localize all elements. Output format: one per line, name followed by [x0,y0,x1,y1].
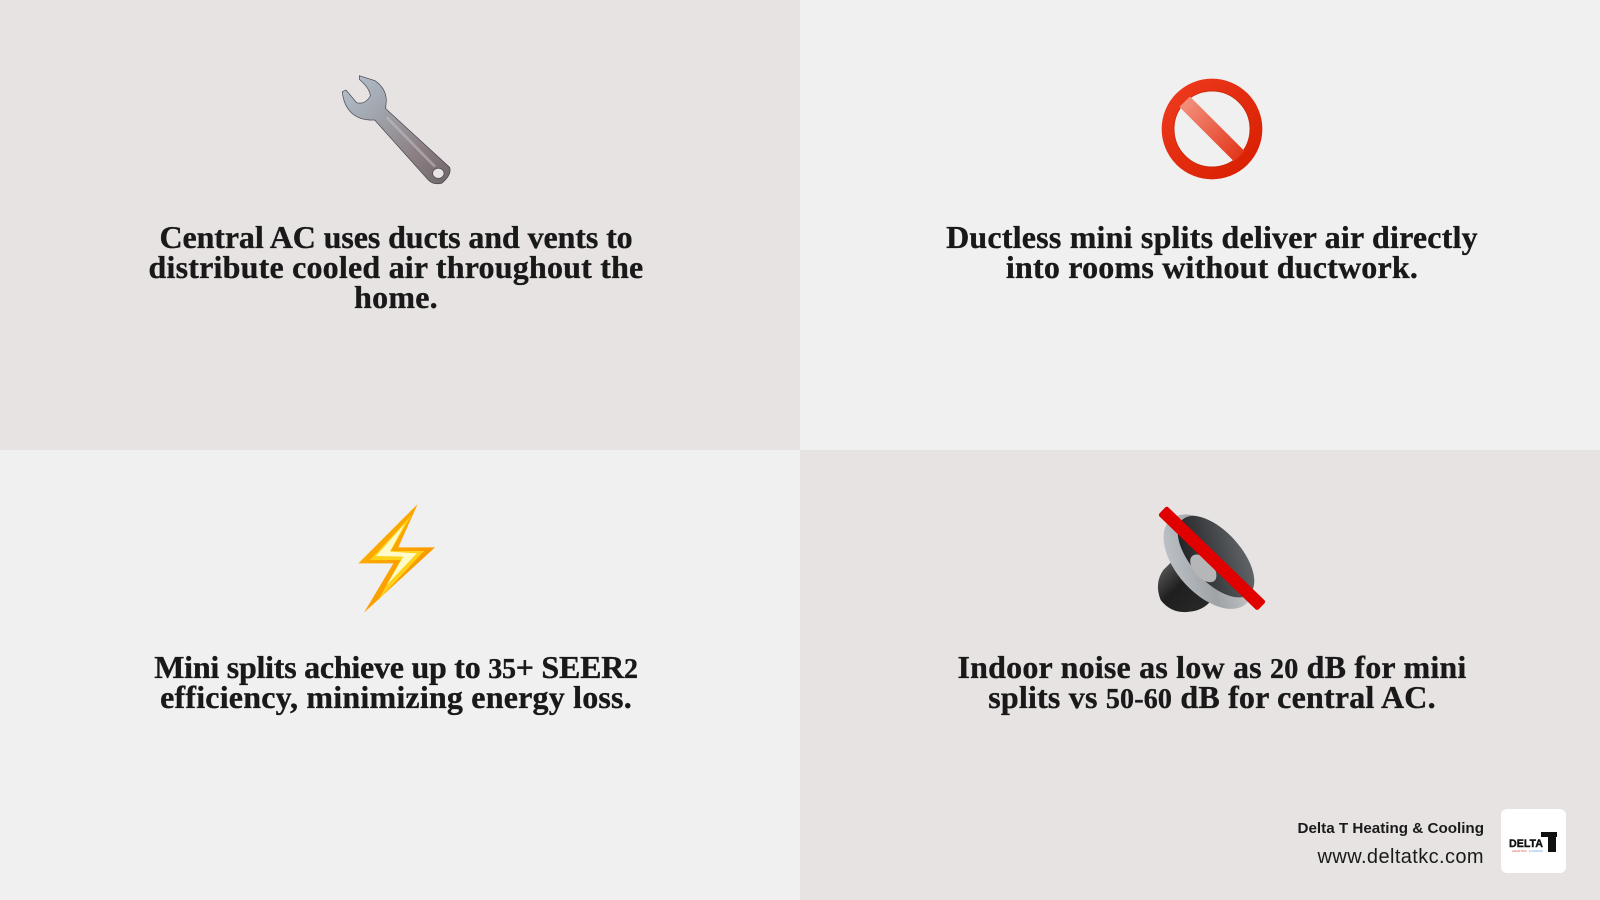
logo: Delta T [1501,809,1566,873]
panel: central AC [0,0,800,450]
text: efficiency [154,649,638,716]
text: central AC: home. [354,279,438,315]
company name: Delta T Heating & Cooling [1298,820,1484,837]
text: noise: Indoor noise as low as 20 dB for mini [958,649,1466,685]
website: www.deltatkc.com [1318,846,1484,868]
icon: muted speaker [1158,506,1266,612]
text: central AC [149,219,643,315]
text: central AC: distribute cooled air throughout the [149,249,643,285]
text: noise: splits vs 50-60 dB for central AC. [988,679,1436,715]
text: noise [958,649,1466,716]
text: ductless mini splits: Ductless mini splits deliver air directly [946,219,1478,255]
text: efficiency: efficiency, minimizing energy loss. [160,679,632,715]
text: central AC: Central AC uses ducts and vents to [159,219,633,255]
logo: Delta T: & COOLING [1529,849,1544,853]
panel: ductless mini splits [800,0,1600,450]
icon: prohibited sign [1162,78,1262,180]
logo: Delta T: DELTA [1509,838,1543,850]
icon: wrench [342,75,450,184]
logo: Delta T: HEATING [1512,849,1528,853]
text: efficiency: Mini splits achieve up to 35+ SEER2 [154,649,638,685]
panel: noise [800,450,1600,900]
text: ductless mini splits: into rooms without ductwork. [1006,249,1418,285]
panel: efficiency [0,450,800,900]
icon: lightning bolt [358,504,435,612]
branding: company name and website [1298,820,1484,868]
text: ductless mini splits [946,219,1478,285]
